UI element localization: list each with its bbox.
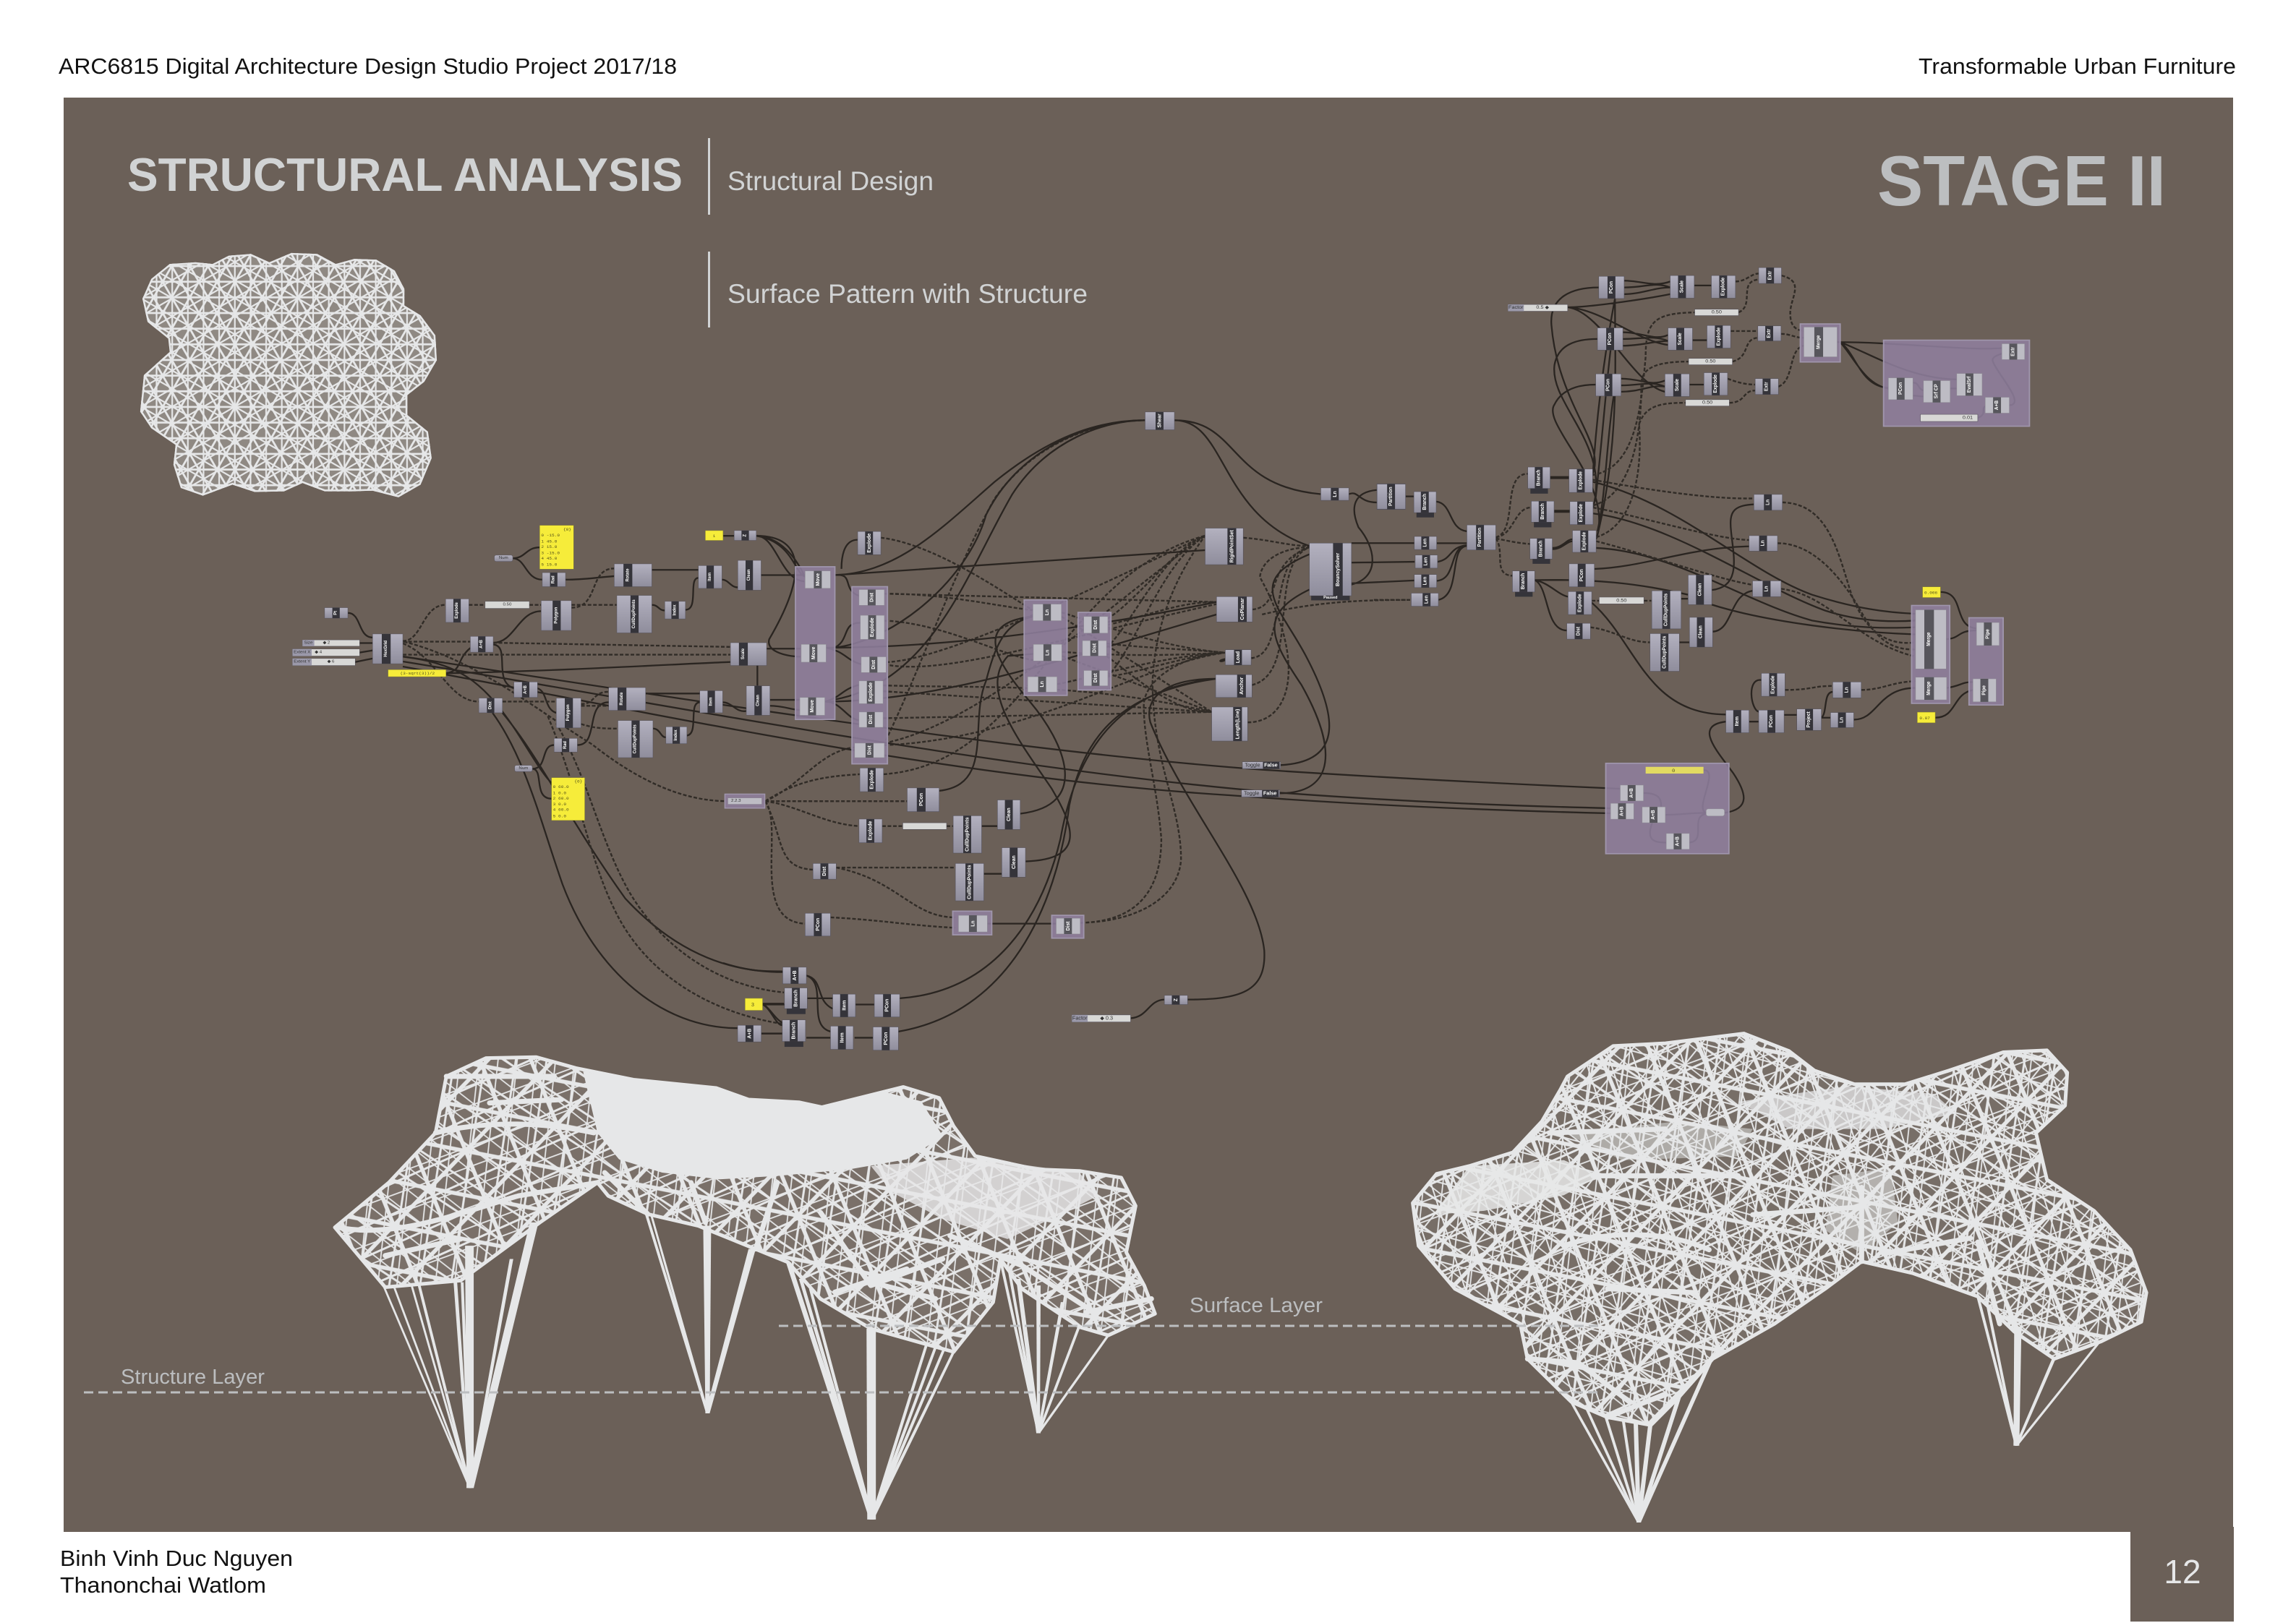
component nodes: pcon scale explode rows: Scale bbox=[1679, 281, 1685, 293]
component nodes: kangaroo solver goals: Partition bbox=[1388, 487, 1394, 507]
component nodes: kangaroo solver goals bbox=[1145, 412, 1405, 1005]
component nodes: hex grid and rotate chain: Z bbox=[743, 534, 748, 536]
footer: authors: Binh Vinh Duc Nguyen bbox=[60, 1546, 293, 1571]
component nodes: kangaroo solver goals: Paused bbox=[1323, 596, 1337, 600]
structure layer label: Structure Layer bbox=[121, 1366, 265, 1389]
component nodes: culling and cleaning chain: Clean bbox=[1006, 808, 1012, 821]
component nodes: hex grid and rotate chain: Dist bbox=[488, 701, 493, 709]
yellow panels: pipe radii: 0 bbox=[1672, 768, 1675, 774]
yellow panel: second rotation angles: 0 60.0 bbox=[553, 784, 569, 789]
yellow panels: pipe radii: 0.006 bbox=[1924, 591, 1938, 595]
components inside groups: Move bbox=[811, 646, 816, 659]
bottom cluster: anchors: A+B bbox=[746, 1029, 752, 1039]
components inside groups: Dist bbox=[1091, 643, 1097, 653]
components inside groups: Ln bbox=[1044, 609, 1050, 615]
page number box: 12 bbox=[2164, 1553, 2201, 1590]
component nodes: kangaroo solver goals: Z bbox=[1173, 998, 1179, 1001]
component nodes: pcon scale explode rows: PCon bbox=[1605, 379, 1611, 391]
component nodes: pcon scale explode rows: Explode bbox=[1716, 327, 1722, 346]
component nodes: pcon scale explode rows: Extr bbox=[1764, 382, 1770, 391]
yellow panel: second rotation angles: 2 60.0 bbox=[553, 796, 569, 801]
component nodes: culling and cleaning chain: Explode bbox=[869, 770, 875, 789]
component nodes: partition, branch and explode: Branch bbox=[1540, 503, 1545, 520]
bottom cluster: anchors: PCon bbox=[883, 1032, 889, 1045]
component nodes: hex grid and rotate chain: Index bbox=[673, 604, 678, 616]
component nodes: culling and cleaning chain: Dist bbox=[821, 866, 827, 876]
bottom cluster: anchors: PCon bbox=[884, 999, 890, 1012]
yellow panel: second rotation angles: 3 0.0 bbox=[553, 802, 566, 807]
component nodes: partition, branch and explode: Len bbox=[1422, 539, 1428, 547]
header: course title: ARC6815 Digital Architecture Design Studio Project 2017/18 bbox=[59, 53, 677, 79]
component nodes: merge and pipe: PCon bbox=[1769, 715, 1774, 727]
number sliders: hex grid size and extents: Size bbox=[304, 641, 313, 645]
boolean toggles: False bbox=[1264, 762, 1278, 768]
component nodes: hex grid and rotate chain bbox=[325, 531, 770, 758]
component nodes: pcon scale explode rows bbox=[1596, 267, 2025, 413]
factor slider and length sliders bbox=[1508, 304, 1978, 604]
bottom cluster: anchors: Branch bbox=[793, 990, 799, 1007]
page number box bbox=[2130, 1527, 2234, 1622]
component nodes: partition, branch and explode: Explode bbox=[1577, 594, 1582, 612]
header: project name: Transformable Urban Furniture bbox=[1919, 53, 2236, 79]
yellow panel: expression bbox=[388, 669, 446, 677]
component nodes: culling and cleaning chain: CullDupPoints bbox=[966, 865, 973, 899]
grasshopper wires: right cluster bbox=[1374, 273, 2015, 842]
components inside groups: Dist bbox=[871, 659, 876, 669]
component nodes: hex grid and rotate chain: Polygon bbox=[554, 607, 558, 624]
component nodes: hex grid and rotate chain: Item bbox=[708, 573, 712, 581]
number sliders: hex grid size and extents: Extent X bbox=[294, 651, 310, 655]
yellow panel: rotation angles: 0 -15.0 bbox=[541, 533, 560, 538]
factor slider: ◆ 0.3 bbox=[1100, 1016, 1113, 1021]
grasshopper wires: centre tangle bbox=[723, 420, 1414, 1037]
component nodes: pcon scale explode rows: PCon bbox=[1608, 333, 1613, 345]
parameter sliders and number params bbox=[485, 555, 532, 771]
component nodes: pcon scale explode rows: Explode bbox=[1720, 278, 1726, 296]
number sliders: hex grid size and extents: ◆ 4 bbox=[315, 651, 323, 655]
yellow panel: rotation angles: 4 45.0 bbox=[541, 556, 558, 561]
component nodes: partition, branch and explode: Explode bbox=[1582, 532, 1587, 550]
component nodes: pcon scale explode rows: Scale bbox=[1675, 379, 1680, 391]
bottom cluster: anchors: Item bbox=[839, 1032, 845, 1043]
bottom cluster: anchors: 3 bbox=[751, 1003, 754, 1009]
number sliders: hex grid size and extents: ◆ 6 bbox=[328, 660, 335, 664]
yellow panel: second rotation angles: 4 60.0 bbox=[553, 808, 569, 813]
bottom cluster: anchors: A+B bbox=[792, 970, 798, 980]
component nodes: merge and pipe: A+B bbox=[1629, 788, 1634, 798]
heading divider and subtitle: structural design: Structural Design bbox=[727, 166, 934, 196]
factor slider and length sliders: 0.50 bbox=[1712, 310, 1722, 314]
component nodes: hex grid and rotate chain: Rad bbox=[563, 741, 568, 749]
component nodes: kangaroo solver goals: Anchor bbox=[1239, 677, 1245, 695]
component nodes: partition, branch and explode: Branch bbox=[1538, 541, 1544, 557]
component nodes: pcon scale explode rows: Extr bbox=[1767, 329, 1772, 338]
grasshopper wires: left cluster bbox=[348, 536, 804, 1033]
component nodes: hex grid and rotate chain: Pt bbox=[334, 611, 338, 615]
component nodes: partition, branch and explode: Branch bbox=[1536, 470, 1541, 486]
component nodes: merge and pipe: A+B bbox=[1675, 836, 1681, 847]
yellow panels: pipe radii bbox=[1646, 587, 1940, 774]
component nodes: partition, branch and explode: Dist bbox=[1576, 626, 1582, 635]
components inside groups: Ln bbox=[970, 920, 976, 927]
title: STRUCTURAL ANALYSIS bbox=[127, 148, 683, 201]
component nodes: hex grid and rotate chain: A+B bbox=[479, 639, 484, 648]
component nodes: partition, branch and explode: Explode bbox=[1578, 471, 1584, 489]
factor slider and length sliders: Factor bbox=[1508, 305, 1524, 310]
yellow panel: value one bbox=[705, 531, 723, 541]
component nodes: hex grid and rotate chain: Clean bbox=[747, 569, 751, 581]
component nodes: partition, branch and explode bbox=[1377, 467, 1783, 672]
components inside groups: Dist bbox=[1093, 620, 1098, 630]
components inside groups: Ln bbox=[1044, 650, 1050, 656]
grasshopper components: right cluster bbox=[1377, 267, 2029, 854]
component nodes: partition, branch and explode: CullDupPoints bbox=[1662, 635, 1667, 669]
component nodes: partition, branch and explode: CullDupPoints bbox=[1663, 594, 1669, 626]
components inside groups: Ln bbox=[1039, 681, 1045, 688]
yellow panel: second rotation angles: 5 0.0 bbox=[553, 814, 566, 818]
component nodes: kangaroo solver goals: Length(Line) bbox=[1234, 709, 1240, 739]
component nodes: kangaroo solver goals: Ln bbox=[1332, 491, 1338, 497]
factor slider and length sliders: 0.50 bbox=[1616, 599, 1627, 603]
component nodes: hex grid and rotate chain: CullDupPoints bbox=[632, 599, 636, 628]
component nodes: partition, branch and explode: Clean bbox=[1698, 625, 1704, 638]
yellow panel: rotation angles bbox=[539, 526, 573, 569]
component nodes: pcon scale explode rows: Srf CP bbox=[1934, 384, 1939, 398]
grasshopper components: left cluster bbox=[292, 526, 770, 821]
component nodes: kangaroo solver goals: BouncySolver bbox=[1335, 553, 1341, 586]
component nodes: hex grid and rotate chain: Item bbox=[709, 697, 714, 706]
parameter sliders and number params: Num bbox=[499, 556, 508, 560]
heading divider and subtitle: structural design bbox=[708, 138, 934, 215]
lavender groups on the right bbox=[1606, 324, 2029, 854]
yellow panel: second rotation angles: {0} bbox=[574, 779, 582, 784]
component nodes: culling and cleaning chain: Explode bbox=[866, 534, 872, 553]
factor slider and length sliders: 0.01 bbox=[1963, 416, 1973, 420]
component nodes: partition, branch and explode: Clean bbox=[1697, 583, 1702, 596]
bottom cluster: anchors: Item bbox=[841, 1001, 847, 1011]
yellow panel: rotation angles: 1 45.0 bbox=[541, 539, 558, 544]
yellow panel: value one: 1 bbox=[713, 534, 716, 539]
parameter sliders and number params: Num bbox=[518, 766, 528, 771]
component nodes: pcon scale explode rows: PCon bbox=[1609, 281, 1614, 294]
component nodes: merge and pipe: Merge bbox=[1926, 632, 1932, 646]
component nodes: merge and pipe: A+B bbox=[1619, 806, 1625, 816]
stage label: STAGE II bbox=[1877, 141, 2166, 220]
factor slider and length sliders: 0.5 ◆ bbox=[1536, 305, 1550, 310]
components inside groups bbox=[800, 571, 1108, 934]
parameter sliders and number params: 0.50 bbox=[503, 603, 512, 607]
component nodes: partition, branch and explode: Branch bbox=[1521, 573, 1526, 589]
component nodes: partition, branch and explode: Ln bbox=[1760, 540, 1766, 546]
component nodes: merge and pipe: Explode bbox=[1770, 675, 1776, 694]
structure layer dashed line bbox=[84, 1391, 1600, 1394]
component nodes: hex grid and rotate chain: CullDupPoints bbox=[633, 724, 638, 753]
surface layer label: Surface Layer bbox=[1190, 1294, 1323, 1317]
plan view: surface pattern with structure bbox=[140, 253, 437, 497]
bottom cluster: anchors bbox=[738, 967, 900, 1050]
components inside groups: Dist bbox=[868, 714, 874, 724]
component nodes: partition, branch and explode: Ln bbox=[1764, 586, 1770, 591]
component nodes: partition, branch and explode: Ln bbox=[1765, 500, 1770, 505]
component nodes: culling and cleaning chain: CullDupPoints bbox=[964, 817, 970, 852]
component nodes: kangaroo solver goals: CoPlanar bbox=[1239, 598, 1245, 620]
component nodes: hex grid and rotate chain: Rotate bbox=[620, 692, 624, 706]
component nodes: merge and pipe bbox=[1610, 610, 2000, 849]
3D structure right: legs bbox=[1570, 1296, 2101, 1523]
yellow panel: expression: (3-sqrt(3))/2 bbox=[400, 671, 435, 676]
component nodes: culling and cleaning chain: PCon bbox=[918, 793, 924, 806]
boolean toggles bbox=[1242, 762, 1281, 797]
factor slider bbox=[1072, 1015, 1130, 1022]
yellow panel: rotation angles: 3 -15.0 bbox=[541, 551, 560, 555]
component nodes: hex grid and rotate chain: Clean bbox=[756, 695, 760, 706]
component nodes: merge and pipe: Ln bbox=[1844, 687, 1849, 693]
boolean toggles: Toggle bbox=[1244, 790, 1259, 796]
yellow panel: rotation angles: 5 15.0 bbox=[541, 562, 558, 567]
components inside groups: Dist bbox=[1065, 921, 1071, 931]
bottom cluster: anchors: Branch bbox=[790, 1022, 797, 1040]
components inside groups: Move bbox=[809, 700, 815, 713]
component nodes: merge and pipe: A+B bbox=[1651, 810, 1656, 820]
component nodes: merge and pipe: Pipe bbox=[1985, 629, 1991, 639]
components inside groups: Explode bbox=[869, 617, 875, 637]
component nodes: partition, branch and explode: Len bbox=[1423, 557, 1429, 565]
lavender group: input parameter bbox=[725, 794, 765, 808]
component nodes: culling and cleaning chain: PCon bbox=[815, 918, 821, 931]
component nodes: pcon scale explode rows: Extr bbox=[2010, 347, 2016, 356]
yellow panel: rotation angles: {0} bbox=[563, 527, 571, 532]
component nodes: kangaroo solver goals: RigidPointSet bbox=[1229, 530, 1235, 562]
component nodes: partition, branch and explode: Explode bbox=[1579, 504, 1584, 522]
components inside groups: Explode bbox=[868, 682, 874, 702]
surface layer dashed line bbox=[779, 1324, 1600, 1327]
component nodes: hex grid and rotate chain: A+B bbox=[524, 685, 528, 694]
component nodes: hex grid and rotate chain: Polygon bbox=[566, 704, 571, 721]
component nodes: hex grid and rotate chain: HexGrid bbox=[384, 641, 388, 657]
component nodes: partition, branch and explode: PCon bbox=[1579, 569, 1584, 581]
component nodes: merge and pipe: Ln bbox=[1839, 717, 1845, 723]
3D structure left: legs bbox=[383, 1214, 1110, 1520]
yellow panel: second rotation angles bbox=[552, 778, 585, 821]
heading divider and subtitle: surface pattern: Surface Pattern with Structure bbox=[727, 279, 1088, 309]
component nodes: partition, branch and explode: Len bbox=[1422, 577, 1428, 585]
components inside groups: Move bbox=[815, 573, 821, 586]
component nodes: partition, branch and explode: Partition bbox=[1388, 487, 1394, 506]
grasshopper wires: long links across the canvas bbox=[403, 656, 1620, 813]
component nodes: pcon scale explode rows: EvalSrf bbox=[1967, 376, 1972, 393]
number sliders: hex grid size and extents: Extent Y bbox=[294, 660, 310, 664]
factor slider: Factor bbox=[1072, 1016, 1088, 1021]
component nodes: pcon scale explode rows: A+B bbox=[1994, 401, 2000, 410]
component nodes: culling and cleaning chain: Explode bbox=[867, 821, 874, 840]
boolean toggles: False bbox=[1263, 790, 1277, 796]
component nodes: kangaroo solver goals: Shear bbox=[1156, 414, 1163, 427]
number sliders: hex grid size and extents: ◆ 2 bbox=[323, 641, 330, 645]
components inside groups: Dist bbox=[866, 745, 872, 755]
component nodes: pcon scale explode rows: Explode bbox=[1713, 374, 1718, 393]
3D structure left: surface and structure mesh bbox=[333, 1055, 1157, 1353]
component nodes: hex grid and rotate chain: Index bbox=[674, 729, 678, 741]
component nodes: partition, branch and explode: Len bbox=[1424, 595, 1429, 604]
3D structure right: surface and structure mesh bbox=[1403, 1027, 2155, 1453]
component nodes: culling and cleaning chain: Clean bbox=[1011, 855, 1017, 869]
component nodes: pcon scale explode rows: Scale bbox=[1678, 333, 1683, 345]
component nodes: hex grid and rotate chain: Rad bbox=[552, 575, 556, 583]
factor slider and length sliders: 0.50 bbox=[1702, 401, 1712, 406]
factor slider and length sliders: 0.50 bbox=[1705, 359, 1716, 364]
footer: authors bbox=[60, 1546, 293, 1598]
component nodes: merge and pipe: Pipe bbox=[1981, 685, 1987, 695]
components inside groups: Dist bbox=[869, 592, 875, 602]
number sliders: hex grid size and extents bbox=[292, 640, 359, 666]
lavender groups: move, dist, line bbox=[795, 567, 1111, 938]
component nodes: pcon scale explode rows: Merge bbox=[1816, 335, 1822, 349]
boolean toggles: Toggle bbox=[1245, 762, 1260, 768]
component nodes: pcon scale explode rows: PCon bbox=[1898, 382, 1903, 395]
heading divider and subtitle: surface pattern bbox=[708, 252, 1088, 327]
components inside groups: Dist bbox=[1093, 673, 1098, 682]
component nodes: hex grid and rotate chain: Scale bbox=[741, 648, 746, 659]
component nodes: merge and pipe: Project bbox=[1806, 711, 1811, 728]
footer: authors: Thanonchai Watlom bbox=[60, 1572, 266, 1598]
yellow panel: second rotation angles: 1 0.0 bbox=[553, 791, 566, 795]
grasshopper components: centre cluster bbox=[738, 412, 1405, 1050]
component nodes: hex grid and rotate chain: Explode bbox=[455, 601, 459, 619]
lavender group: input parameter: 2.2.3 bbox=[731, 799, 741, 803]
component nodes: merge and pipe: Item bbox=[1735, 716, 1740, 726]
component nodes: kangaroo solver goals: Load bbox=[1235, 651, 1241, 663]
component nodes: pcon scale explode rows: Extr bbox=[1767, 270, 1772, 281]
component nodes: hex grid and rotate chain: Rotate bbox=[626, 568, 630, 582]
component nodes: partition, branch and explode: Branch bbox=[1422, 494, 1427, 510]
component nodes: culling and cleaning chain bbox=[805, 531, 1025, 936]
yellow panel: rotation angles: 2 15.0 bbox=[541, 544, 558, 549]
component nodes: partition, branch and explode: Partition bbox=[1477, 528, 1482, 547]
component nodes: merge and pipe: Merge bbox=[1926, 681, 1932, 695]
yellow panels: pipe radii: 0.07 bbox=[1919, 716, 1930, 721]
